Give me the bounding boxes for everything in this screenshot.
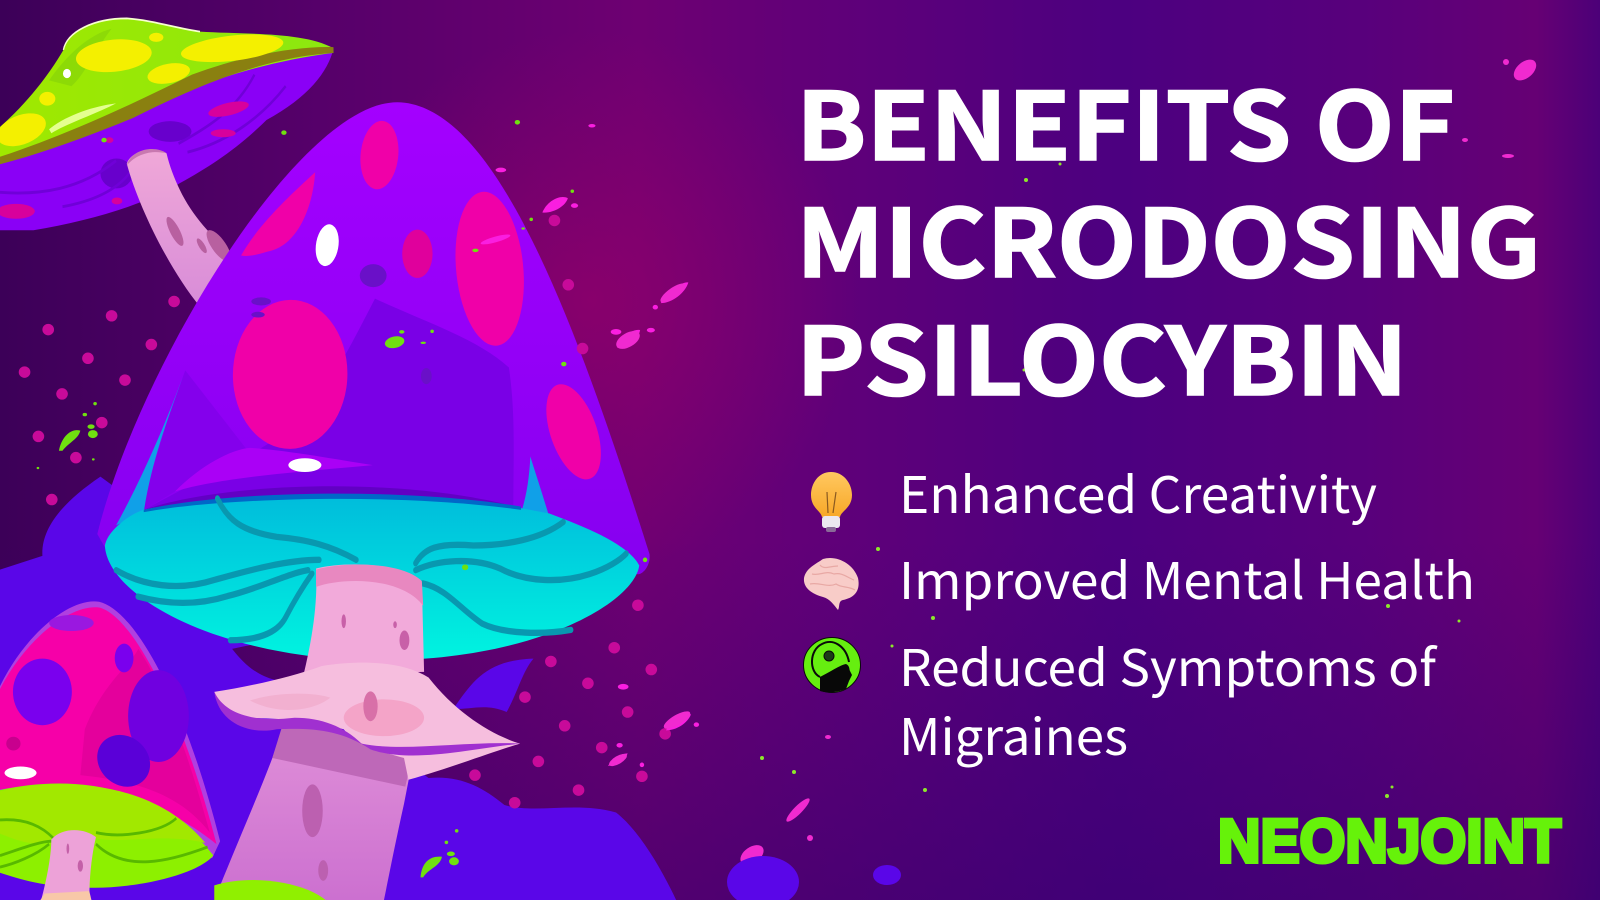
green splatters [37, 120, 647, 877]
paint specks [19, 215, 671, 808]
title: PSILOCYBIN [796, 287, 1408, 423]
benefits list [804, 454, 1475, 770]
benefit: reduced symptoms of migraines: Migraines [899, 696, 1128, 770]
icon: brain [804, 558, 859, 610]
main mushroom [97, 102, 650, 900]
illustration: mushrooms [0, 18, 699, 900]
main mushroom underside [105, 494, 639, 660]
icon: light bulb [811, 472, 852, 532]
title: BENEFITS OF [796, 52, 1455, 188]
title: MICRODOSING [796, 169, 1541, 305]
logo: NEONJOINT [1218, 807, 1561, 875]
icon: head with green halo [804, 638, 860, 692]
benefit: reduced symptoms of migraines [899, 627, 1438, 770]
right side splatters [607, 56, 1540, 900]
main mushroom stem [214, 564, 520, 900]
benefit: enhanced creativity: Enhanced Creativity [899, 454, 1377, 528]
top-left mushroom [0, 18, 333, 307]
magenta splatters [480, 124, 699, 767]
benefit: improved mental health: Improved Mental Health [899, 540, 1475, 614]
title [796, 52, 1541, 423]
blue paint blob [0, 477, 676, 900]
benefit: reduced symptoms of migraines: Reduced Symptoms of [899, 627, 1438, 701]
main mushroom cap [97, 102, 650, 574]
bottom-left mushroom [0, 601, 220, 900]
